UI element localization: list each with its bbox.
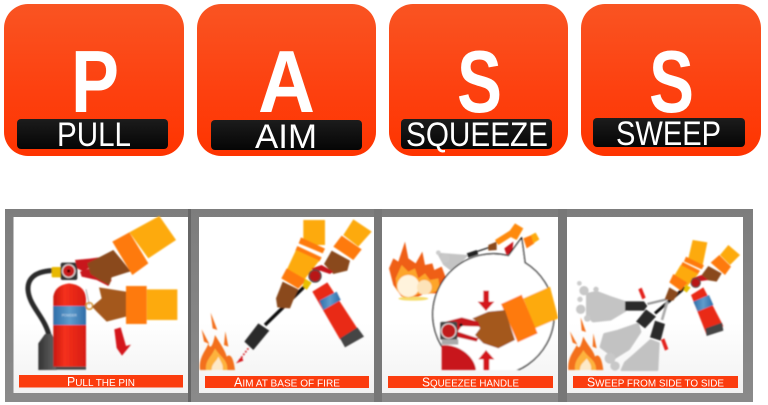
illustration: aim: [200, 219, 372, 370]
letter S: S: [649, 32, 694, 131]
tile: A aim: [197, 4, 376, 156]
label bar: squeeze: SQUEEZE: [406, 116, 548, 154]
panel: pull the pin: [14, 209, 191, 402]
illustration: pull the pin: POWDER: [62, 313, 77, 317]
letter S: S: [457, 32, 502, 131]
letter A: A: [258, 32, 315, 131]
caption banner: squeeze: SQUEEZEE HANDLE: [422, 374, 519, 390]
letter P: P: [71, 32, 119, 131]
label bar: pull: PULL: [57, 116, 131, 154]
label bar: sweep: SWEEP: [616, 115, 721, 153]
illustration: pull the pin: [28, 216, 177, 370]
illustration: sweep: [568, 240, 740, 371]
label bar: aim: [211, 118, 362, 156]
caption banner: pull the pin: [19, 374, 183, 389]
tile: S squeeze: [389, 4, 568, 156]
tile: P pull: [4, 4, 184, 156]
illustration: squeeze: [389, 223, 558, 375]
caption banner: aim: [205, 374, 369, 390]
grey frame behind steps: [5, 209, 753, 402]
tile: S sweep: [581, 4, 761, 156]
caption banner: squeeze: [388, 374, 553, 390]
caption banner: pull the pin: PULL THE PIN: [67, 374, 135, 389]
label bar: aim: AIM: [255, 118, 317, 156]
panel: squeeze handle: [382, 209, 567, 402]
label bar: pull: [17, 116, 168, 154]
caption banner: sweep: SWEEP FROM SIDE TO SIDE: [587, 374, 724, 390]
panel: sweep side to side: [567, 217, 743, 393]
caption banner: aim: AIM AT BASE OF FIRE: [234, 374, 340, 390]
panel: aim at base of fire: [199, 209, 382, 402]
